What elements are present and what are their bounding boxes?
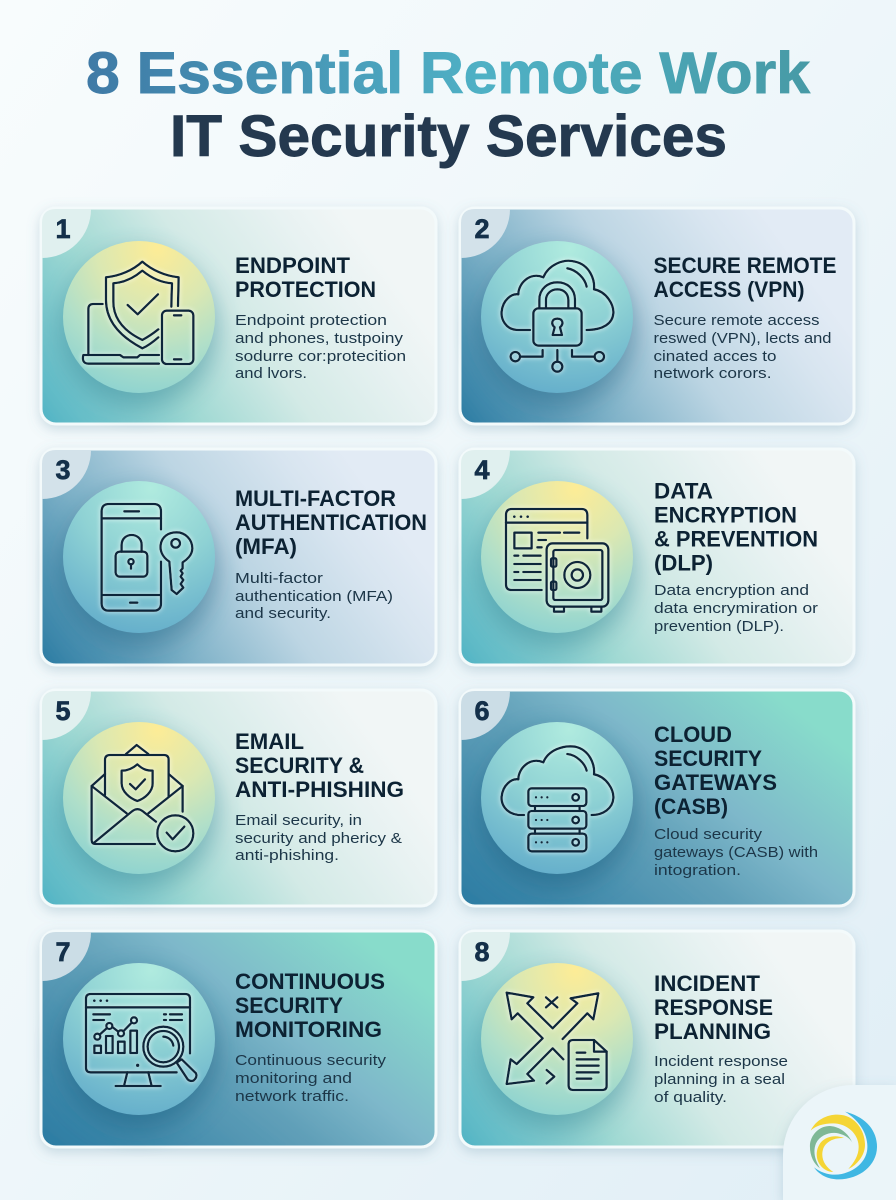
icon: cloud padlock [502, 261, 613, 372]
text 7: network traffic. [235, 1089, 349, 1105]
number badge 8 [461, 932, 510, 981]
icon: logo swirl [810, 1112, 877, 1179]
title: 8 Essential Remote Work [86, 41, 811, 106]
heading 8 [654, 971, 773, 1044]
heading 7: CONTINUOUS [235, 969, 385, 994]
number badge 3: 3 [55, 455, 71, 485]
icon: shield laptop phone [83, 262, 193, 364]
icon circle 1 [61, 241, 217, 407]
heading 3 [235, 486, 427, 559]
logo panel [783, 1085, 896, 1200]
text 5: security and phericy & [235, 831, 402, 847]
heading 3: (MFA) [235, 534, 297, 559]
text 6: Cloud security [654, 827, 763, 843]
number badge 1 [42, 209, 91, 258]
heading 1 [235, 253, 376, 302]
panel: 2 secure remote access [460, 208, 854, 424]
icon circle 7 [61, 963, 217, 1129]
number badge 4: 4 [474, 455, 490, 485]
number badge 5 [42, 691, 91, 740]
panel: 6 cloud security gateways [460, 690, 854, 906]
text 5 [235, 813, 402, 864]
heading 4: & PREVENTION [654, 526, 818, 552]
icon: arrows and document [507, 993, 607, 1090]
heading 6: SECURITY [654, 746, 762, 771]
heading 3: MULTI-FACTOR [235, 486, 396, 511]
number badge 8: 8 [474, 937, 490, 967]
icon: envelope with shield [92, 745, 193, 851]
text 5: Email security, in [235, 813, 362, 829]
panel: 1 endpoint protection [41, 208, 436, 424]
heading 7: SECURITY [235, 993, 343, 1018]
text 1: sodurre cor:protecition [235, 349, 406, 365]
heading 6: (CASB) [654, 794, 728, 819]
icon circle 3 [61, 481, 217, 647]
text 3: authentication (MFA) [235, 589, 393, 605]
text 5: anti-phishing. [235, 848, 339, 864]
text 2: network corors. [654, 366, 772, 382]
text 2: Secure remote access [654, 313, 820, 329]
heading 5: SECURITY & [235, 753, 364, 778]
text 4: data encrymiration or [654, 601, 818, 617]
panel: 8 incident response [460, 931, 854, 1147]
text 2: cinated acces to [654, 349, 776, 365]
text 2 [654, 313, 832, 382]
text 1: and lvors. [235, 366, 307, 382]
text 3: and security. [235, 606, 331, 622]
number badge 7: 7 [55, 937, 71, 967]
text 4 [654, 583, 818, 635]
text 4: prevention (DLP). [654, 619, 784, 635]
heading 8: PLANNING [654, 1019, 771, 1044]
text 8: planning in a seal [654, 1072, 785, 1088]
text 3 [235, 571, 393, 622]
heading 5: ANTI-PHISHING [235, 777, 404, 802]
icon circle 8 [479, 963, 635, 1129]
text 4: Data encryption and [654, 583, 809, 599]
heading 2: SECURE REMOTE [654, 253, 836, 278]
heading 2 [654, 253, 836, 302]
number badge 2 [461, 209, 510, 258]
panel: 3 multi-factor authentication [41, 449, 436, 665]
heading 5 [235, 729, 404, 802]
number badge 2: 2 [474, 214, 490, 244]
icon: cloud and servers [502, 746, 613, 851]
text 1: Endpoint protection [235, 313, 387, 329]
icon circle 5 [61, 722, 217, 888]
text 2: reswed (VPN), lects and [654, 331, 832, 347]
text 7 [235, 1053, 387, 1105]
heading 6: CLOUD [654, 722, 732, 747]
heading 5: EMAIL [235, 729, 304, 754]
text 8: Incident response [654, 1054, 788, 1070]
heading 8: RESPONSE [654, 995, 773, 1020]
number badge 3 [42, 450, 91, 499]
icon: monitor and magnifier [86, 994, 196, 1086]
heading 8: INCIDENT [654, 971, 761, 996]
icon: document and safe [506, 509, 608, 612]
panel: 7 continuous monitoring [41, 931, 436, 1147]
icon: phone and key [102, 504, 192, 611]
heading 7 [235, 969, 385, 1042]
number badge 5: 5 [55, 696, 71, 726]
heading 4: ENCRYPTION [654, 502, 797, 528]
heading 2: ACCESS (VPN) [654, 277, 804, 302]
panel: 5 email security [41, 690, 436, 906]
icon circle 2 [479, 241, 635, 407]
title [86, 41, 811, 169]
number badge 4 [461, 450, 510, 499]
heading 1: ENDPOINT [235, 253, 351, 278]
text 8: of quality. [654, 1090, 727, 1106]
heading 6: GATEWAYS [654, 770, 777, 795]
text 1: and phones, tustpoiny [235, 331, 404, 347]
heading 7: MONITORING [235, 1017, 382, 1042]
text 3: Multi-factor [235, 571, 323, 587]
number badge 1: 1 [55, 214, 71, 244]
number badge 6 [461, 691, 510, 740]
heading 1: PROTECTION [235, 277, 376, 302]
number badge 6: 6 [474, 696, 490, 726]
heading 6 [654, 722, 777, 819]
text 7: Continuous security [235, 1053, 387, 1069]
title: IT Security Services [170, 104, 727, 169]
text 7: monitoring and [235, 1071, 352, 1087]
text 6: intogration. [654, 863, 741, 879]
heading 4 [654, 478, 818, 576]
text 1 [235, 313, 406, 382]
icon circle 6 [479, 722, 635, 888]
heading 4: (DLP) [654, 550, 713, 576]
panel: 4 data encryption [460, 449, 854, 665]
icon circle 4 [479, 481, 635, 647]
heading 4: DATA [654, 478, 713, 504]
number badge 7 [42, 932, 91, 981]
text 6: gateways (CASB) with [654, 845, 818, 861]
text 6 [654, 827, 818, 879]
heading 3: AUTHENTICATION [235, 510, 427, 535]
text 8 [654, 1054, 788, 1106]
